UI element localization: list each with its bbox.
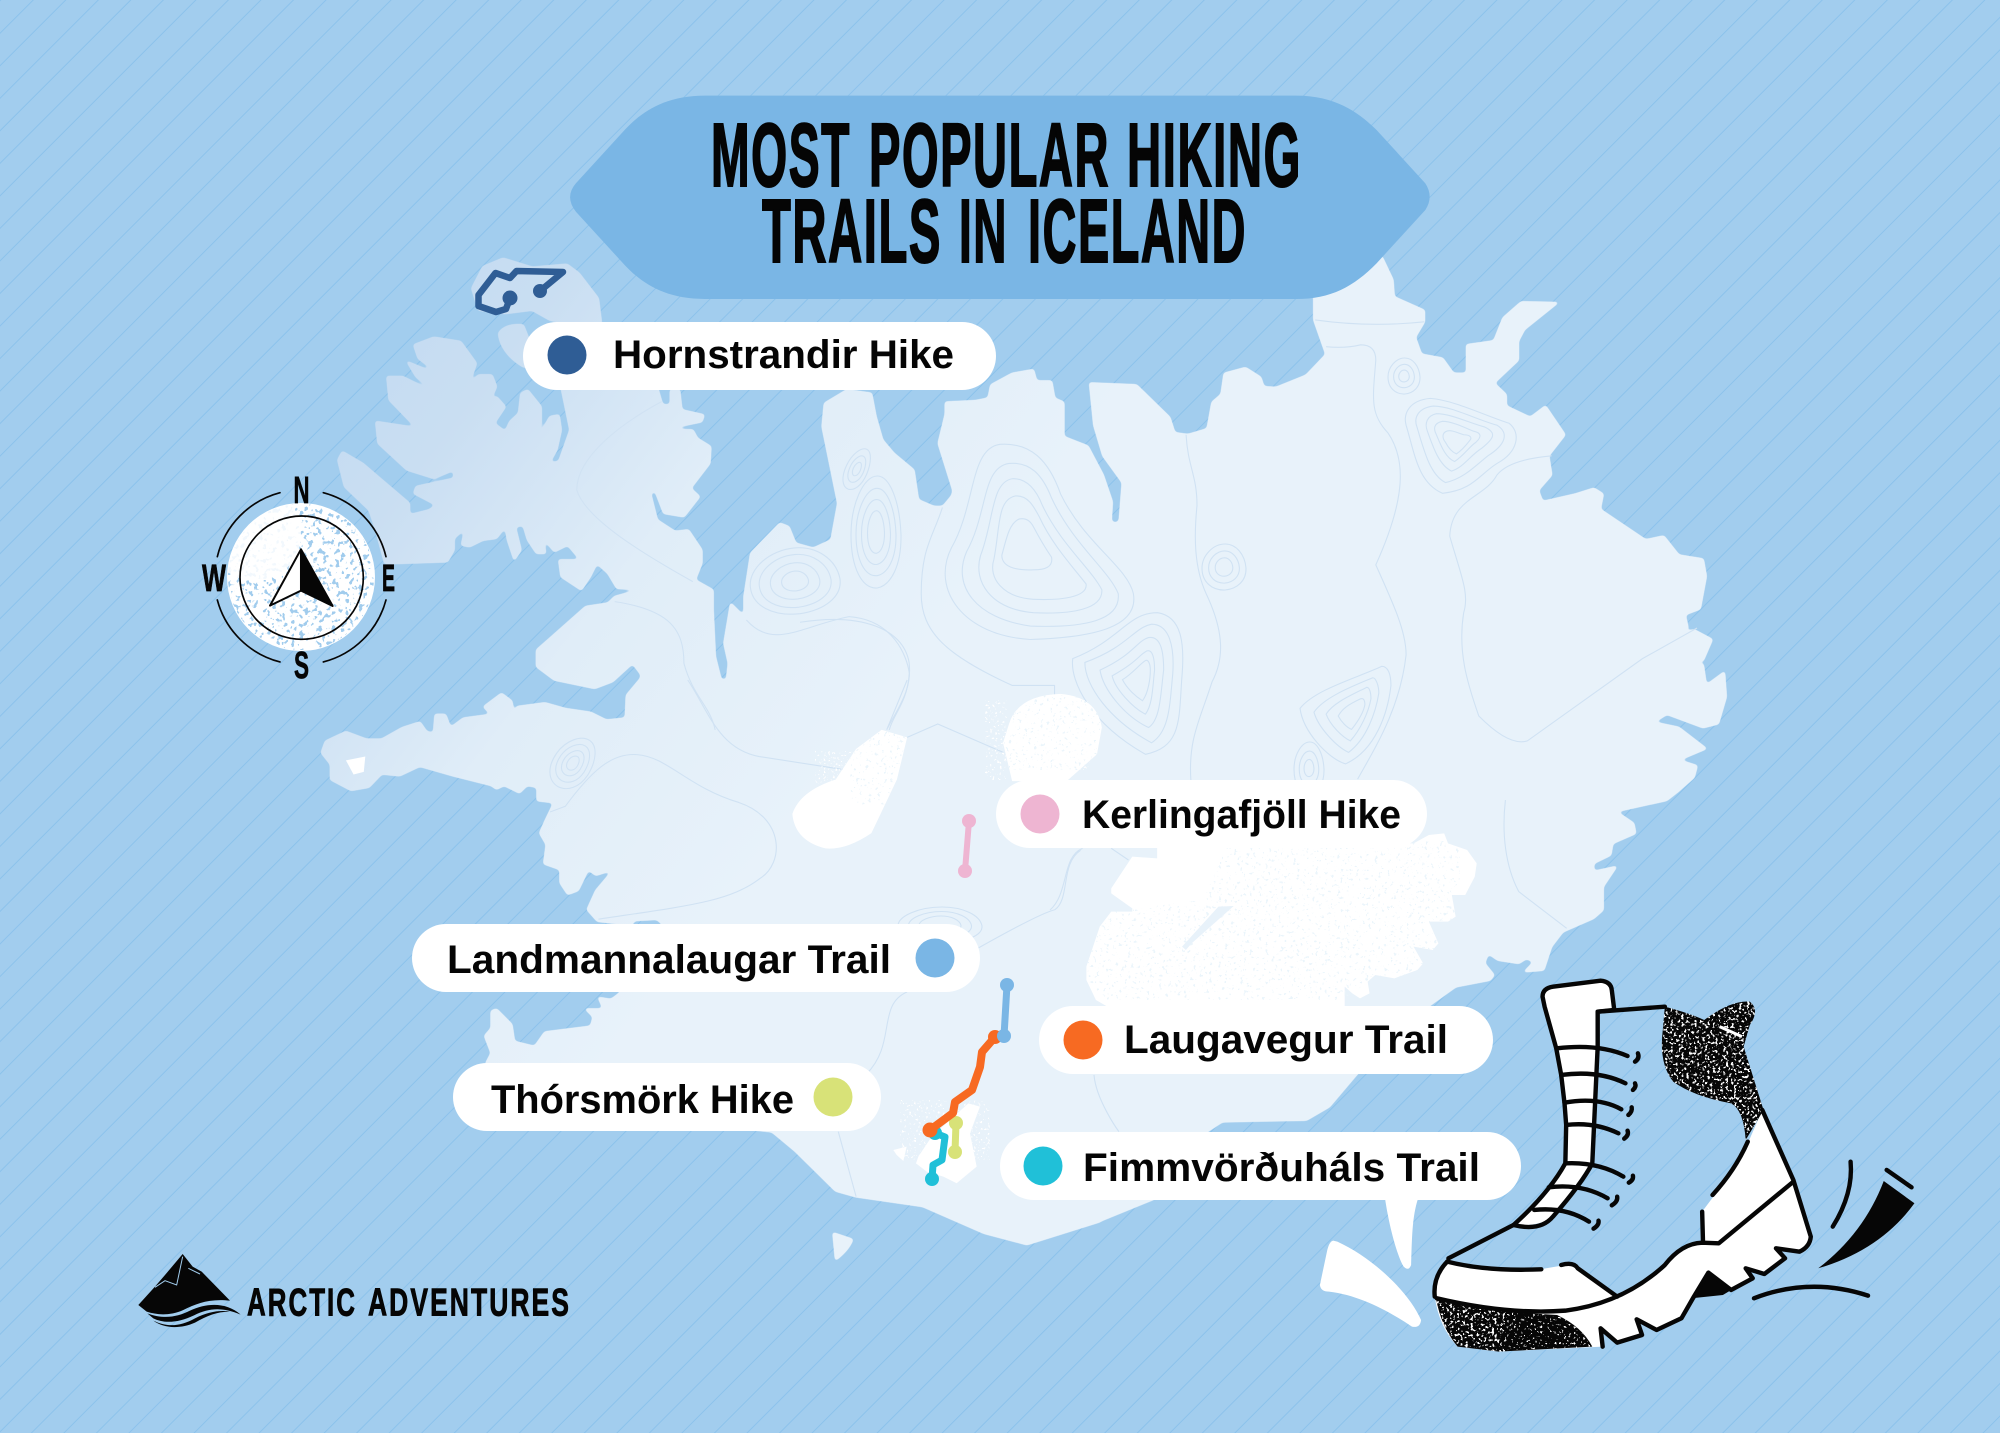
compass bbox=[202, 470, 395, 687]
boot: motion lines bbox=[1754, 1162, 1914, 1298]
boot: laces bbox=[1534, 1047, 1639, 1229]
title text: ICELAND bbox=[1028, 182, 1247, 282]
white motion swoosh by the boot bbox=[1320, 1241, 1421, 1327]
logo mountain mark bbox=[138, 1254, 241, 1327]
glacier: Hofsjökull bbox=[1003, 694, 1102, 781]
glacier texture: loose ice flecks bbox=[815, 700, 1090, 1160]
title text: MOST bbox=[711, 106, 851, 206]
label: Laugavegur Trail: Laugavegur Trail bbox=[1124, 1018, 1448, 1062]
label: Laugavegur Trail bbox=[1039, 1006, 1493, 1074]
title text: IN bbox=[959, 182, 1008, 282]
trail: Kerlingafjöll Hike bbox=[958, 814, 976, 878]
boot: rear panel bbox=[1702, 1110, 1793, 1243]
glacier: Snæfellsjökull bbox=[346, 757, 365, 775]
boot: heel tab bbox=[1662, 1002, 1764, 1140]
logo wordmark bbox=[247, 1282, 571, 1324]
compass disc bbox=[227, 503, 375, 651]
boot: outlines bbox=[1434, 981, 1811, 1347]
boot: sole speckle bbox=[1437, 1300, 1590, 1352]
logo: Arctic Adventures bbox=[138, 1254, 571, 1327]
logo wordmark: ARCTIC bbox=[247, 1282, 357, 1324]
trail: Laugavegur Trail bbox=[922, 1030, 1002, 1138]
compass letters: N bbox=[294, 470, 310, 512]
glacier: Vatnajökull bbox=[1086, 833, 1477, 1007]
label: Landmannalaugar Trail bbox=[412, 924, 980, 992]
trail: Thórsmörk Hike bbox=[948, 1116, 963, 1159]
label: Fimmvörðuháls Trail speech bubble: Fimmvörðuháls Trail bbox=[1083, 1146, 1480, 1190]
hiking boot illustration bbox=[1430, 981, 1914, 1360]
trail: Fimmvörðuháls Trail bbox=[925, 1126, 945, 1186]
trail: Hornstrandir Hike bbox=[478, 271, 563, 312]
glacier: Langjökull bbox=[792, 730, 907, 849]
glacier texture: Vatnajökull speckle bbox=[1088, 841, 1460, 1000]
title text: HIKING bbox=[1127, 106, 1302, 206]
title text bbox=[711, 106, 1302, 282]
boot: dark sole wear bbox=[1436, 1298, 1592, 1352]
compass letters: E bbox=[382, 558, 395, 600]
title text: POPULAR bbox=[869, 106, 1110, 206]
trail: Landmannalaugar Trail bbox=[997, 978, 1014, 1043]
boot: sole and toe bbox=[1434, 1182, 1811, 1352]
label: Thórsmörk Hike: Thórsmörk Hike bbox=[491, 1078, 794, 1122]
compass letters bbox=[202, 470, 395, 687]
logo wordmark: ADVENTURES bbox=[368, 1282, 571, 1324]
label: Thórsmörk Hike bbox=[453, 1063, 881, 1131]
compass outer ring arcs bbox=[217, 493, 386, 662]
compass letters: S bbox=[294, 645, 309, 687]
compass needle bbox=[270, 549, 333, 606]
label: Fimmvörðuháls Trail speech bubble bbox=[1000, 1132, 1521, 1269]
map: glaciers and ice caps bbox=[346, 694, 1477, 1183]
label: Hornstrandir Hike bbox=[523, 322, 996, 390]
compass speckle texture bbox=[228, 504, 374, 650]
label: Hornstrandir Hike: Hornstrandir Hike bbox=[613, 333, 954, 377]
title banner bbox=[570, 96, 1430, 299]
boot: heel tab speckle bbox=[1662, 1002, 1762, 1140]
trails on the map bbox=[478, 271, 1014, 1186]
boot: collar and lacing strip bbox=[1514, 981, 1614, 1225]
compass letters: W bbox=[202, 558, 226, 600]
boot: tread gap bbox=[1692, 1273, 1731, 1298]
map: elevation contour lines bbox=[541, 320, 1697, 1197]
label: Kerlingafjöll Hike: Kerlingafjöll Hike bbox=[1082, 793, 1401, 837]
glacier: Mýrdalsjökull and Eyjafjallajökull bbox=[893, 1103, 980, 1183]
glacier texture: Langjökull and Hofsjökull speckle bbox=[850, 690, 1100, 805]
label: Landmannalaugar Trail: Landmannalaugar Trail bbox=[447, 938, 891, 982]
label: Kerlingafjöll Hike bbox=[996, 780, 1427, 848]
map: Iceland landmass bbox=[320, 257, 1728, 1260]
title text: TRAILS bbox=[762, 182, 942, 282]
